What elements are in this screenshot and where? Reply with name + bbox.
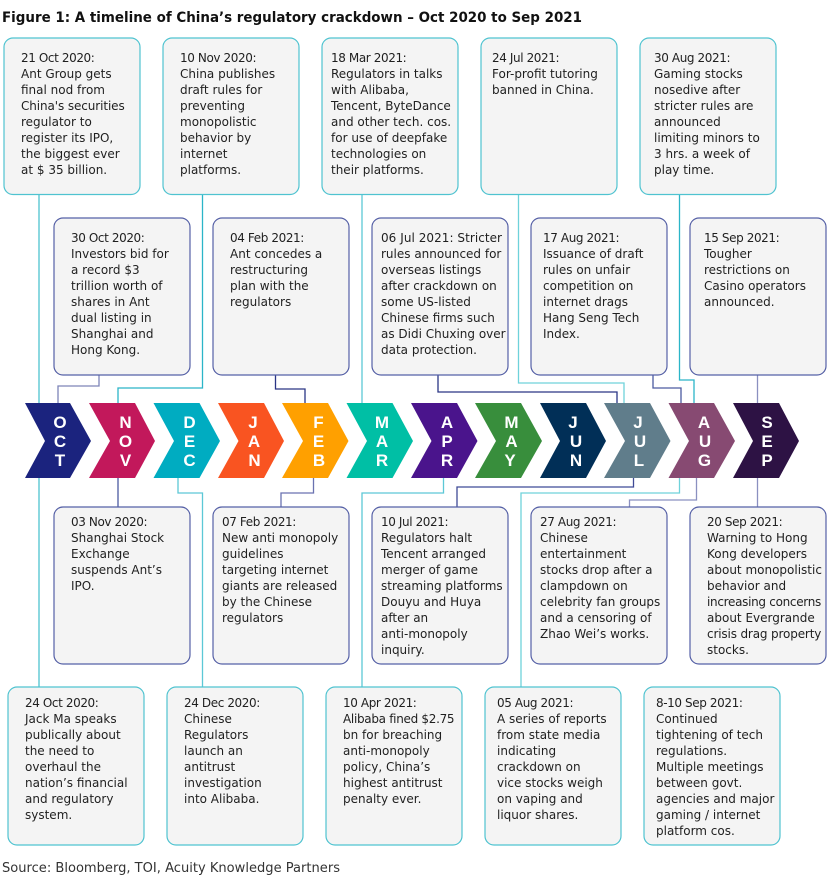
panel: 15 Sep 2021: Casino operators — [704, 279, 806, 293]
panel: 10 Nov 2020: China publishes — [180, 67, 275, 81]
panel: 10 Nov 2020: platforms. — [180, 163, 241, 177]
panel: 24 Oct 2020: system. — [25, 808, 72, 822]
panel: 24 Jul 2021: 24 Jul 2021: — [492, 51, 559, 65]
panel: 20 Sep 2021: about Evergrande — [707, 611, 815, 625]
panel: 15 Sep 2021: announced. — [704, 295, 775, 309]
panel: 20 Sep 2021 — [690, 507, 826, 664]
panel: 24 Oct 2020: and regulatory — [25, 792, 113, 806]
panel: 24 Jul 2021: banned in China. — [492, 83, 594, 97]
panel: 04 Feb 2021: restructuring — [230, 263, 308, 277]
panel: 17 Aug 2021: 17 Aug 2021: — [543, 231, 619, 245]
panel: 10 Nov 2020: behavior by — [180, 131, 251, 145]
panel: 15 Sep 2021: restrictions on — [704, 263, 790, 277]
chevron: October: O — [53, 413, 67, 432]
panel: 24 Dec 2020: into Alibaba. — [184, 792, 259, 806]
panel: 05 Aug 2021: vice stocks weigh — [497, 776, 603, 790]
panel: 06 Jul 2021: some US-listed — [381, 295, 471, 309]
chevron: July — [604, 403, 670, 478]
chevron: June: U — [570, 432, 582, 451]
panel: 10 Jul 2021: inquiry. — [381, 643, 425, 657]
panel: 06 Jul 2021: overseas listings — [381, 263, 481, 277]
panel: 20 Sep 2021: behavior and — [707, 579, 786, 593]
panel: 27 Aug 2021: stocks drop after a — [540, 563, 653, 577]
connectors — [39, 194, 758, 687]
month chevrons — [25, 403, 799, 478]
chevron: June: J — [568, 413, 578, 432]
chevron: November: N — [119, 413, 132, 432]
panel: 30 Oct 2020: 30 Oct 2020: — [71, 231, 144, 245]
panel: 30 Aug 2021: play time. — [654, 163, 714, 177]
chevron: September — [733, 403, 799, 478]
panel: 06 Jul 2021: 06 Jul 2021: Stricter — [381, 231, 502, 245]
panel: 21 Oct 2020: China's securities — [21, 99, 125, 113]
chevron: July: J — [633, 413, 643, 432]
chevron: May — [475, 403, 542, 478]
panel: 27 Aug 2021: and a censoring of — [540, 611, 652, 625]
chevron: December: E — [184, 432, 195, 451]
panel: 8-10 Sep 2021: between govt. — [656, 776, 742, 790]
panel: 24 Jul 2021 — [481, 38, 617, 194]
panel: 10 Nov 2020: monopolistic — [180, 115, 256, 129]
panel: 20 Sep 2021: Warning to Hong — [707, 531, 808, 545]
panel: 30 Oct 2020: shares in Ant — [71, 295, 150, 309]
panel: 24 Dec 2020 — [167, 687, 303, 845]
chevron: February: B — [313, 451, 325, 470]
chevron: January: A — [248, 432, 260, 451]
panel: 06 Jul 2021: after crackdown on — [381, 279, 497, 293]
chevron: January: J — [248, 413, 258, 432]
chevron: January: N — [248, 451, 261, 470]
chevron: February: F — [313, 413, 324, 432]
chevron: February — [282, 403, 348, 478]
panel: 07 Feb 2021: giants are released — [222, 579, 337, 593]
panel: 27 Aug 2021: Zhao Wei’s works. — [540, 627, 649, 641]
panel: 04 Feb 2021 — [213, 218, 349, 375]
panel: 18 Mar 2021: with Alibaba, — [331, 83, 409, 97]
panel: 17 Aug 2021: Hang Seng Tech — [543, 311, 639, 325]
panel: 24 Oct 2020: 24 Oct 2020: — [25, 696, 98, 710]
panel: 03 Nov 2020: Exchange — [71, 547, 130, 561]
panel: 07 Feb 2021: New anti monopoly — [222, 531, 338, 545]
panel: 24 Dec 2020: investigation — [184, 776, 262, 790]
chevron: April: P — [441, 432, 453, 451]
chevron: August: A — [698, 413, 710, 432]
panel: 05 Aug 2021: crackdown on — [497, 760, 581, 774]
panel: 15 Sep 2021: 15 Sep 2021: — [704, 231, 779, 245]
panel: 30 Oct 2020: Investors bid for — [71, 247, 169, 261]
panel: 21 Oct 2020: 21 Oct 2020: — [21, 51, 94, 65]
panel: 07 Feb 2021 — [213, 507, 349, 664]
panel: 04 Feb 2021: 04 Feb 2021: — [230, 231, 304, 245]
panel: 21 Oct 2020: final nod from — [21, 83, 105, 97]
panel: 17 Aug 2021: rules on unfair — [543, 263, 630, 277]
panel: 04 Feb 2021: regulators — [230, 295, 291, 309]
chevron: October — [25, 403, 91, 478]
panel: 24 Jul 2021: For-profit tutoring — [492, 67, 598, 81]
chevron: August: U — [699, 432, 711, 451]
chevron: May: M — [504, 413, 519, 432]
panel: 18 Mar 2021: Regulators in talks — [331, 67, 442, 81]
chevron: March: A — [376, 432, 388, 451]
panel: 10 Nov 2020 — [163, 38, 299, 194]
panel: 30 Oct 2020: a record $3 — [71, 263, 140, 277]
panel: 8-10 Sep 2021: Continued — [656, 712, 718, 726]
panel: 10 Nov 2020: preventing — [180, 99, 245, 113]
panel: 30 Aug 2021 — [640, 38, 776, 194]
chevron: March — [346, 403, 413, 478]
panel: 07 Feb 2021: guidelines — [222, 547, 283, 561]
panel: 10 Jul 2021: anti-monopoly — [381, 627, 468, 641]
panel: 20 Sep 2021: crisis drag property — [707, 627, 821, 641]
panel: 10 Jul 2021: Regulators halt — [381, 531, 472, 545]
panel: 03 Nov 2020 — [54, 507, 190, 664]
chevron: August: G — [698, 451, 711, 470]
panel: 27 Aug 2021 — [531, 507, 667, 664]
chevron: July: U — [634, 432, 646, 451]
panel: 10 Jul 2021 — [372, 507, 508, 664]
panel: 24 Oct 2020: overhaul the — [25, 760, 101, 774]
chevron: December — [154, 403, 220, 478]
panel: 20 Sep 2021: 20 Sep 2021: — [707, 515, 782, 529]
panel: 03 Nov 2020: suspends Ant’s — [71, 563, 162, 577]
panel: 30 Aug 2021: 30 Aug 2021: — [654, 51, 730, 65]
panel: 03 Nov 2020: IPO. — [71, 579, 95, 593]
panel: 30 Oct 2020 — [54, 218, 190, 375]
panel: 10 Apr 2021: policy, China’s — [343, 760, 430, 774]
panel: 18 Mar 2021: technologies on — [331, 147, 426, 161]
panel: 21 Oct 2020: Ant Group gets — [21, 67, 112, 81]
panel: 24 Dec 2020: launch an — [184, 744, 243, 758]
panel: 06 Jul 2021: as Didi Chuxing over — [381, 327, 506, 341]
panel: 30 Aug 2021: 3 hrs. a week of — [654, 147, 751, 161]
chevron: May: A — [505, 432, 518, 451]
panel: 24 Dec 2020: Chinese — [184, 712, 232, 726]
panel: 10 Apr 2021 — [326, 687, 462, 845]
panel: 24 Oct 2020: nation’s financial — [25, 776, 128, 790]
chevron: September: E — [761, 432, 773, 451]
panel: 27 Aug 2021: entertainment — [540, 547, 627, 561]
source note: Source: Bloomberg, TOI, Acuity Knowledge Partners — [2, 861, 340, 876]
panel: 27 Aug 2021: clampdown on — [540, 579, 628, 593]
chevron: March: R — [376, 451, 388, 470]
panel: 05 Aug 2021: from state media — [497, 728, 600, 742]
panel: 20 Sep 2021: stocks. — [707, 643, 749, 657]
panel: 15 Sep 2021 — [690, 218, 826, 375]
chevron: July: L — [634, 451, 644, 470]
panel: 10 Jul 2021: Tencent arranged — [380, 547, 486, 561]
chevron: December: D — [183, 413, 196, 432]
panel: 20 Sep 2021: about monopolistic — [707, 563, 822, 577]
panel: 10 Apr 2021: Alibaba fined $2.75 — [343, 712, 454, 726]
panel: 8-10 Sep 2021: agencies and major — [656, 792, 774, 806]
panel: 10 Jul 2021: 10 Jul 2021: — [381, 515, 448, 529]
panel: 05 Aug 2021: on vaping and — [497, 792, 583, 806]
chevron: December: C — [183, 451, 196, 470]
panel: 10 Jul 2021: after an — [381, 611, 428, 625]
panel: 24 Dec 2020: Regulators — [184, 728, 248, 742]
panel: 20 Sep 2021: Kong developers — [707, 547, 807, 561]
panel: 17 Aug 2021: Index. — [543, 327, 580, 341]
panel: 07 Feb 2021: 07 Feb 2021: — [222, 515, 296, 529]
panel: 21 Oct 2020: regulator to — [21, 115, 92, 129]
panel: 05 Aug 2021 — [485, 687, 621, 845]
panel: 18 Mar 2021: their platforms. — [331, 163, 424, 177]
chevron: May: Y — [504, 451, 516, 470]
panel: 06 Jul 2021 — [372, 218, 508, 375]
panel: 21 Oct 2020 — [4, 38, 140, 194]
panel: 24 Oct 2020: Jack Ma speaks — [24, 712, 117, 726]
panel: 05 Aug 2021: A series of reports — [497, 712, 607, 726]
panel: 10 Nov 2020: 10 Nov 2020: — [180, 51, 256, 65]
panel: 21 Oct 2020: at $ 35 billion. — [21, 163, 107, 177]
panel: 8-10 Sep 2021 — [644, 687, 780, 845]
panel: 06 Jul 2021: Chinese firms such — [381, 311, 495, 325]
panel: 10 Nov 2020: internet — [180, 147, 228, 161]
panel: 8-10 Sep 2021: platform cos. — [656, 824, 735, 838]
chevron: September: S — [761, 413, 773, 432]
panel: 18 Mar 2021: Tencent, ByteDance — [330, 99, 451, 113]
panel: 8-10 Sep 2021: gaming / internet — [656, 808, 761, 822]
panel: 06 Jul 2021: data protection. — [381, 343, 477, 357]
chevron: November — [89, 403, 155, 478]
title: Figure 1: A timeline of China’s regulatory crackdown – Oct 2020 to Sep 2021 — [2, 10, 582, 26]
panel: 30 Aug 2021: Gaming stocks — [654, 67, 743, 81]
panel: 24 Oct 2020: publically about — [25, 728, 121, 742]
panel: 21 Oct 2020: register its IPO, — [21, 131, 113, 145]
panel: 17 Aug 2021: Issuance of draft — [543, 247, 644, 261]
panel: 03 Nov 2020: 03 Nov 2020: — [71, 515, 147, 529]
panel: 30 Aug 2021: stricter rules are — [654, 99, 753, 113]
panel: 05 Aug 2021: liquor shares. — [497, 808, 578, 822]
panel: 24 Dec 2020: 24 Dec 2020: — [184, 696, 260, 710]
panel: 18 Mar 2021: for use of deepfake — [331, 131, 447, 145]
chevron: June — [540, 403, 606, 478]
panel: 18 Mar 2021: and other tech. cos. — [331, 115, 451, 129]
panel: 17 Aug 2021: competition on — [543, 279, 633, 293]
panel: 30 Aug 2021: nosedive after — [654, 83, 740, 97]
chevron: September: P — [761, 451, 773, 470]
panel: 30 Oct 2020: Shanghai and — [71, 327, 153, 341]
panel: 24 Oct 2020: the need to — [25, 744, 94, 758]
panel: 10 Apr 2021: bn for breaching — [343, 728, 442, 742]
panel: 10 Apr 2021: anti-monopoly — [343, 744, 430, 758]
chevron: April — [411, 403, 478, 478]
panel: 30 Aug 2021: announced — [654, 115, 721, 129]
chevron: March: M — [375, 413, 389, 432]
panel: 8-10 Sep 2021: regulations. — [656, 744, 727, 758]
chevron: June: N — [570, 451, 582, 470]
chevron: April: A — [441, 413, 453, 432]
panel: 15 Sep 2021: Tougher — [703, 247, 752, 261]
panel: 27 Aug 2021: celebrity fan groups — [540, 595, 660, 609]
panel: 10 Jul 2021: merger of game — [381, 563, 478, 577]
panel: 05 Aug 2021: 05 Aug 2021: — [497, 696, 573, 710]
panel: 18 Mar 2021 — [322, 38, 458, 194]
chevron: October: C — [54, 432, 66, 451]
chevron: November: O — [119, 432, 132, 451]
panel: 07 Feb 2021: regulators — [222, 611, 283, 625]
panel: 27 Aug 2021: 27 Aug 2021: — [540, 515, 616, 529]
panel: 05 Aug 2021: indicating — [497, 744, 556, 758]
chevron: January — [218, 403, 284, 478]
chevron: April: R — [441, 451, 453, 470]
panel: 17 Aug 2021 — [531, 218, 667, 375]
panel: 10 Jul 2021: streaming platforms — [381, 579, 503, 593]
panel: 10 Nov 2020: draft rules for — [180, 83, 262, 97]
panel: 18 Mar 2021: 18 Mar 2021: — [331, 51, 406, 65]
panel: 24 Oct 2020 — [8, 687, 144, 845]
panel: 04 Feb 2021: plan with the — [230, 279, 309, 293]
panel: 03 Nov 2020: Shanghai Stock — [71, 531, 164, 545]
panel: 27 Aug 2021: Chinese — [540, 531, 588, 545]
panel: 04 Feb 2021: Ant concedes a — [230, 247, 322, 261]
panel: 17 Aug 2021: internet drags — [543, 295, 628, 309]
panel: 24 Dec 2020: antitrust — [184, 760, 235, 774]
chevron: November: V — [120, 451, 132, 470]
chevron: February: E — [313, 432, 324, 451]
panel: 8-10 Sep 2021: tightening of tech — [656, 728, 763, 742]
panel: 10 Apr 2021: 10 Apr 2021: — [343, 696, 416, 710]
chevron: August — [668, 403, 735, 478]
panel: 8-10 Sep 2021: Multiple meetings — [656, 760, 763, 774]
panel: 06 Jul 2021: rules announced for — [381, 247, 501, 261]
panel: 20 Sep 2021: increasing concerns — [707, 595, 821, 609]
panel: 07 Feb 2021: by the Chinese — [222, 595, 312, 609]
panel: 30 Oct 2020: Hong Kong. — [71, 343, 140, 357]
panel: 07 Feb 2021: targeting internet — [222, 563, 329, 577]
panel: 10 Apr 2021: highest antitrust — [343, 776, 443, 790]
panel: 10 Jul 2021: Douyu and Huya — [381, 595, 481, 609]
panel: 8-10 Sep 2021: 8-10 Sep 2021: — [656, 696, 742, 710]
panel: 30 Oct 2020: dual listing in — [71, 311, 152, 325]
panel: 10 Apr 2021: penalty ever. — [343, 792, 421, 806]
chevron: October: T — [55, 451, 66, 470]
panel: 21 Oct 2020: the biggest ever — [21, 147, 120, 161]
panel: 30 Aug 2021: limiting minors to — [654, 131, 760, 145]
panel: 30 Oct 2020: trillion worth of — [71, 279, 163, 293]
